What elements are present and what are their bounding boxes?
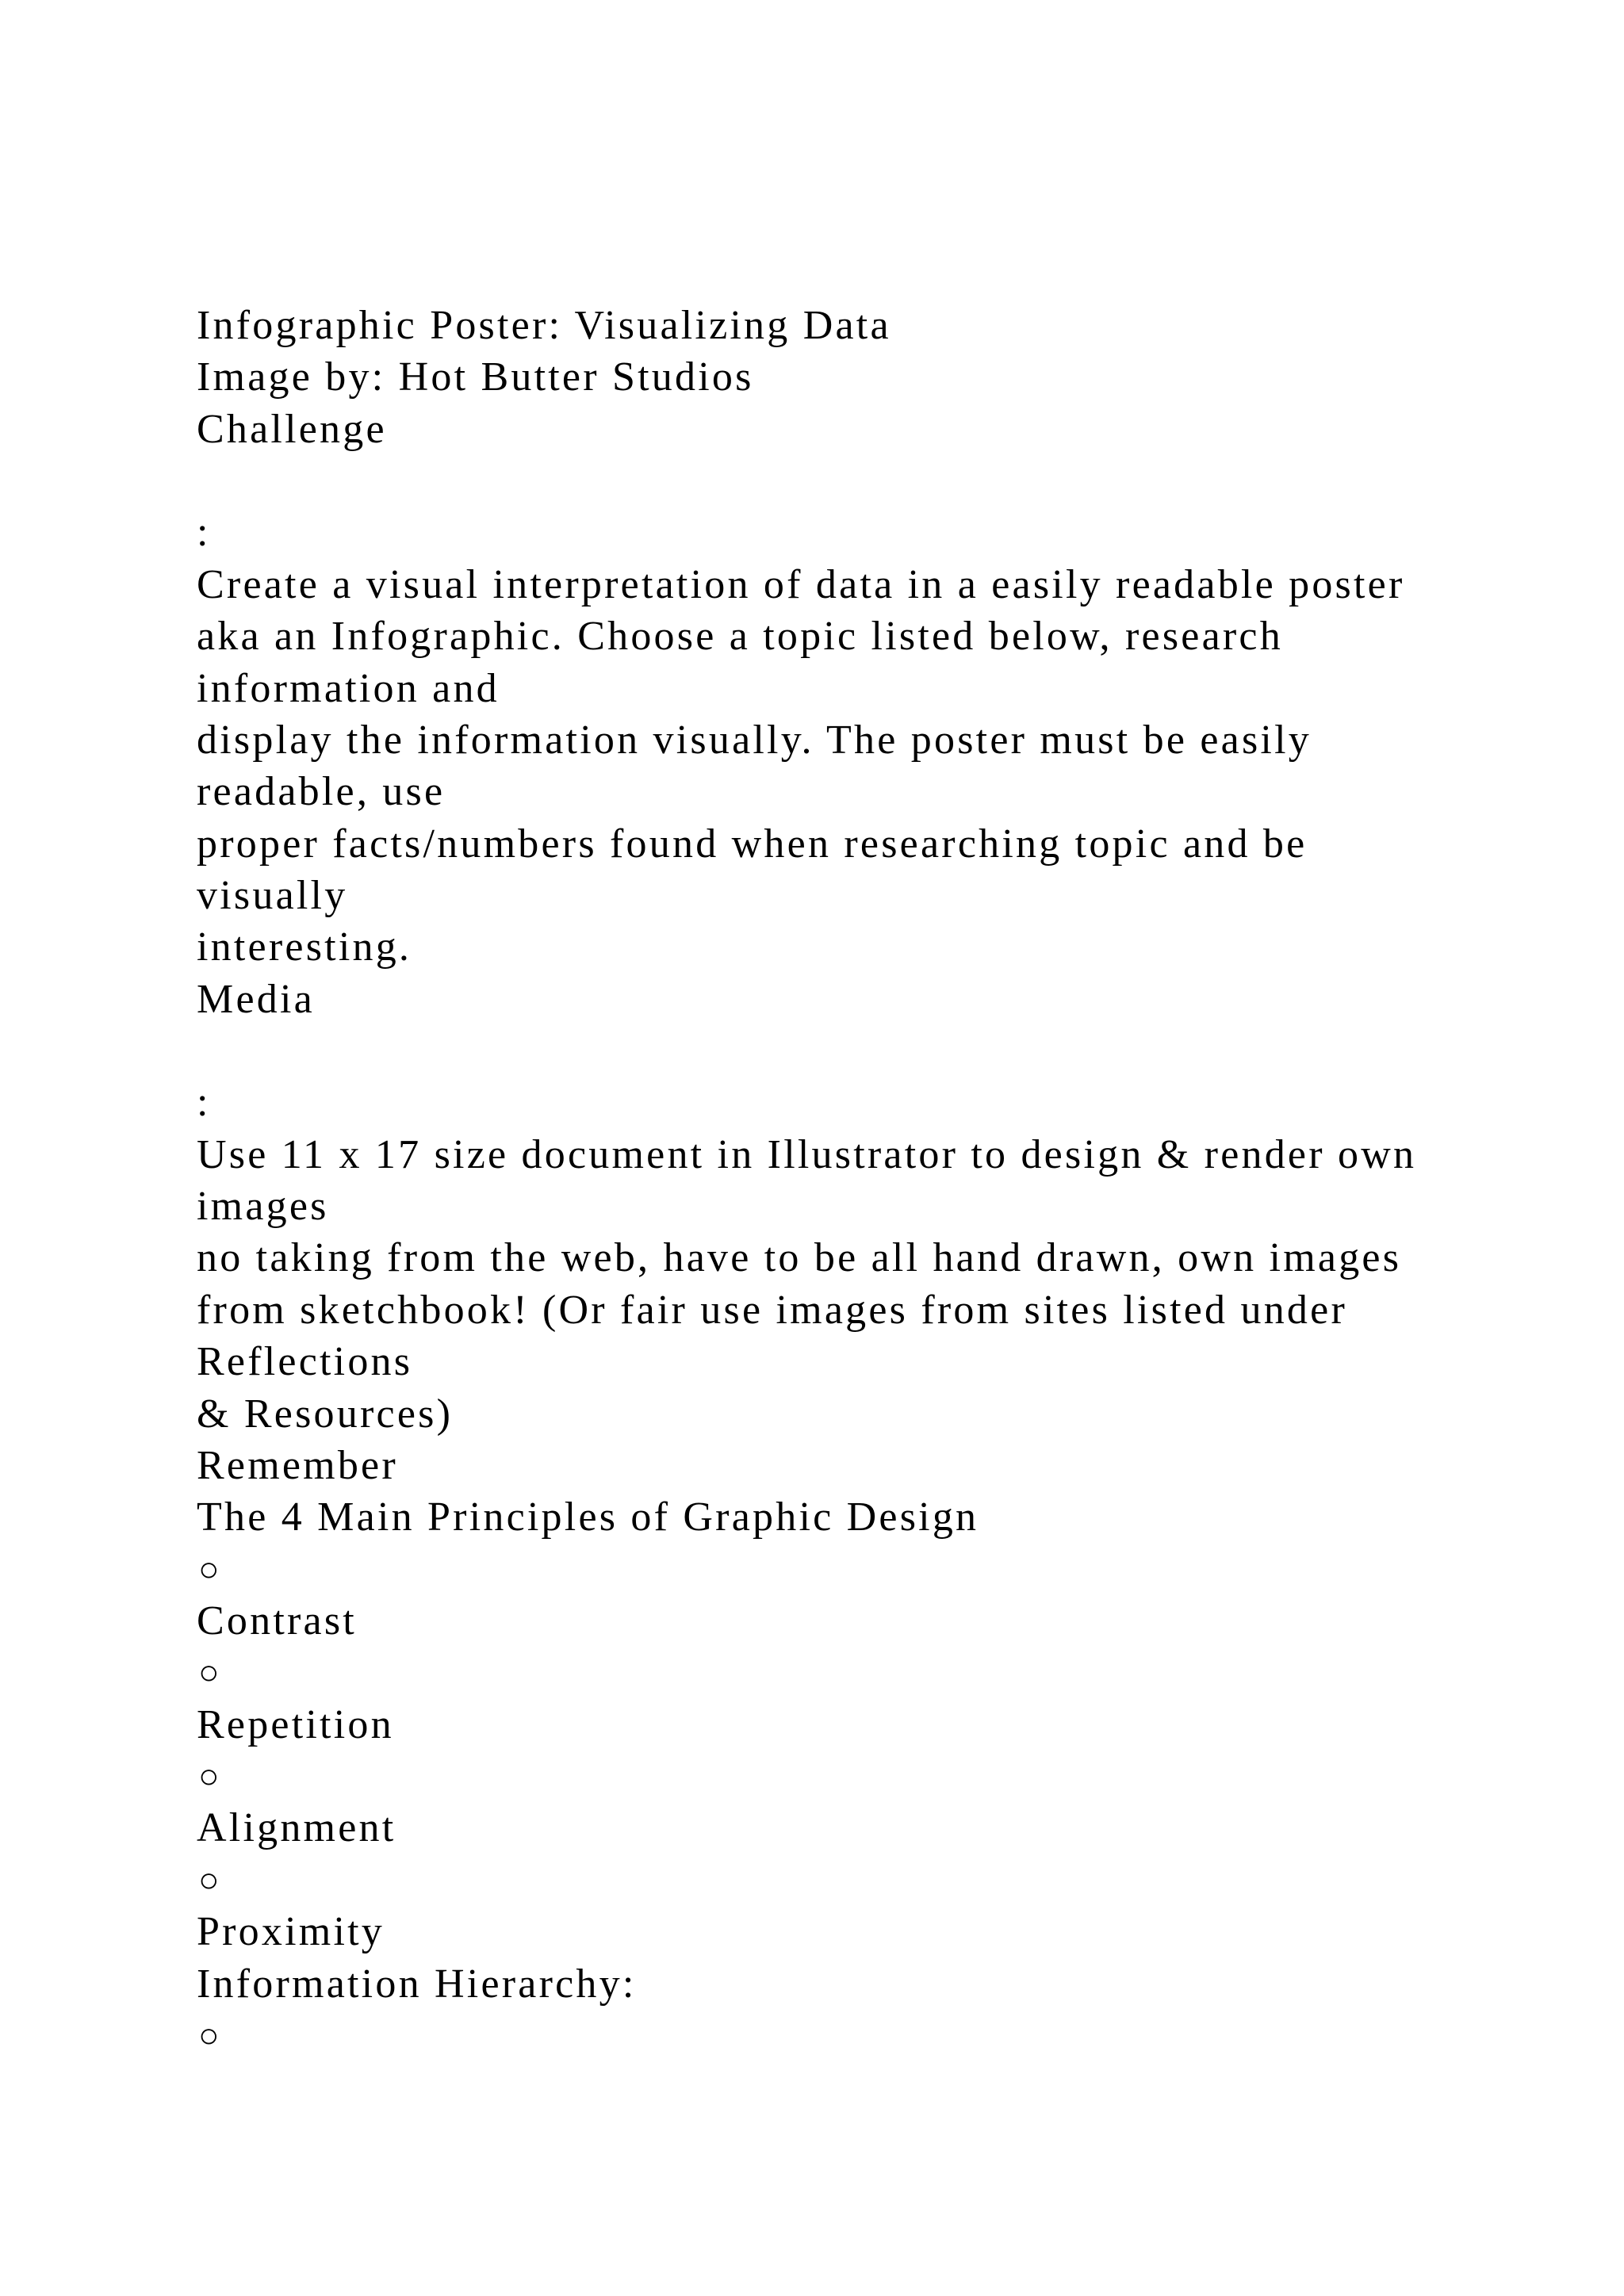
list item: repetition: Repetition (197, 1702, 394, 1747)
heading: information hierarchy: Information Hierarchy: (197, 1961, 637, 2006)
bullet: ○ (198, 1550, 220, 1589)
media text: : Use 11 x 17 size document in Illustrator to design & render own images no taking from the web, have to be all hand drawn, own images from sketchbook! (Or fair use images from sites listed under Reflections & Resources) Remember The 4 Main Principles of Graphic Design (197, 1080, 1416, 1540)
list item: proximity: Proximity (197, 1909, 385, 1954)
challenge text: : Create a visual interpretation of data in a easily readable poster aka an Infographic. Choose a topic listed below, research information and display the information visually. The poster must be easily readable, use proper facts/numbers found when researching topic and be visually interesting. Media (197, 510, 1405, 1022)
list item: alignment: Alignment (197, 1805, 396, 1850)
list item: contrast: Contrast (197, 1598, 357, 1644)
bullet: ○ (198, 1861, 220, 1900)
bullet: ○ (198, 2016, 220, 2055)
title block: Infographic Poster: Visualizing Data Image by: Hot Butter Studios Challenge (197, 303, 891, 452)
bullet: ○ (198, 1653, 220, 1692)
bullet: ○ (198, 1757, 220, 1796)
document text (197, 303, 1416, 2055)
